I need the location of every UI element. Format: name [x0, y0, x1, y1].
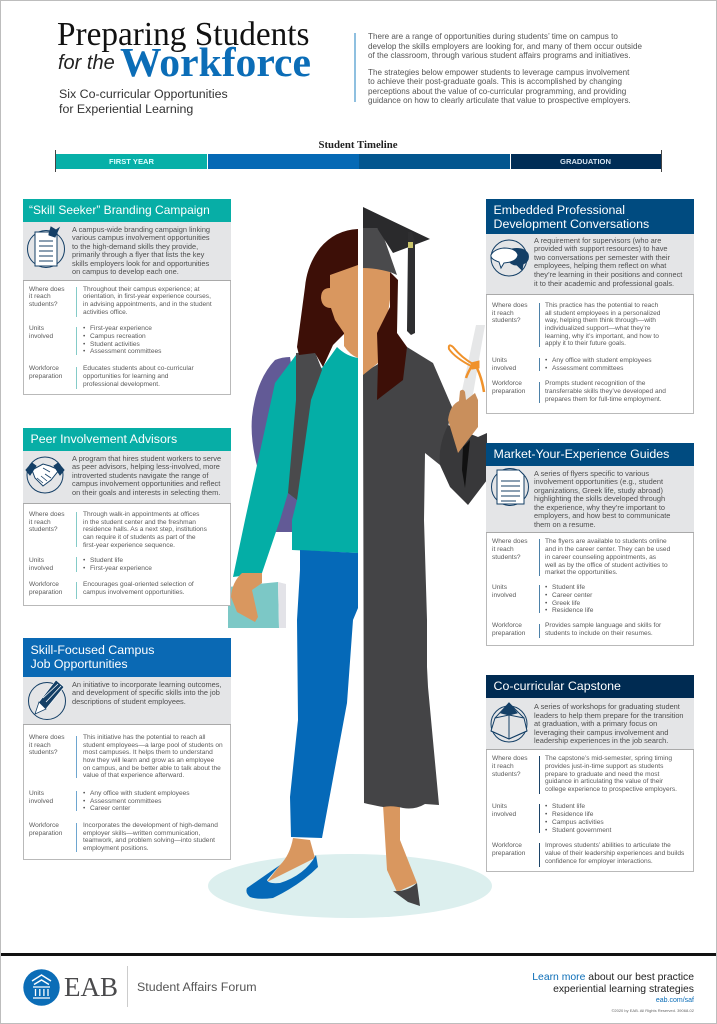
summary text: involvement opportunities (e.g., student	[534, 477, 663, 486]
summary band	[486, 466, 694, 533]
workforce label	[29, 365, 62, 380]
where label: it reach	[492, 546, 514, 553]
units list: Student life	[552, 803, 585, 810]
where label: students?	[492, 554, 521, 561]
icon: document	[491, 468, 529, 506]
where text: The flyers are available to students online	[545, 538, 667, 545]
where label	[492, 538, 528, 561]
student half	[228, 229, 358, 899]
summary text: A requirement for supervisors (who are	[534, 236, 661, 245]
workforce label: preparation	[492, 388, 525, 395]
where text: student employees—a large pool of students on	[83, 742, 223, 749]
where text	[545, 302, 660, 347]
icon: pencil	[28, 680, 66, 720]
heading: Development Conversations	[494, 217, 649, 231]
summary band	[23, 677, 231, 724]
summary text	[534, 236, 682, 288]
workforce label: Workforce	[492, 842, 522, 849]
title	[57, 16, 311, 85]
workforce label	[29, 822, 62, 837]
units list: Residence life	[552, 607, 593, 614]
ribbon	[449, 345, 484, 392]
panel: Embedded Professional Development Conversations	[486, 199, 694, 414]
summary text: employers, and how best to communicate	[534, 511, 670, 520]
workforce label: preparation	[29, 373, 62, 380]
units list: Greek life	[552, 600, 580, 607]
heading: “Skill Seeker” Branding Campaign	[29, 203, 210, 217]
copyright: ©2020 by EAB. All Rights Reserved. 39068-02	[611, 1008, 694, 1013]
where text: well as by the office of student activities to	[545, 562, 668, 569]
units label	[492, 584, 516, 600]
where label	[492, 755, 528, 778]
call to action	[532, 972, 694, 996]
where text	[83, 734, 223, 779]
where text: This initiative has the potential to reach all	[83, 734, 205, 741]
summary text: as peer advisors, helping less-involved, more	[72, 462, 220, 471]
workforce text: Prompts student recognition of the	[545, 380, 645, 387]
where text: college experience to prospective employers.	[545, 786, 677, 793]
where text: value of that experience afterward.	[83, 772, 184, 779]
workforce text: Educates students about co-curricular	[83, 365, 194, 372]
intro text: develop the skills employers are looking for, and many of them occur outside	[368, 42, 642, 50]
units list	[545, 584, 593, 615]
units label: Units	[492, 584, 507, 591]
workforce label: Workforce	[492, 622, 522, 629]
summary text: primarily through a flyer that lists the key	[72, 250, 204, 259]
units list: Residence life	[552, 811, 593, 818]
panel: Co-curricular Capstone	[486, 675, 694, 872]
summary text: to the high-demand skills they provide,	[72, 242, 198, 251]
summary text: A series of flyers specific to various	[534, 469, 649, 478]
icon: EAB logo	[23, 969, 60, 1006]
summary text: skills employers look for and opportunities	[72, 259, 209, 268]
units label: involved	[492, 592, 516, 599]
summary text	[534, 469, 670, 529]
right leg	[383, 805, 417, 892]
summary text	[72, 680, 222, 706]
where text: can require it of students as part of the	[83, 534, 196, 541]
summary text: leaders to help them prepare for the transition	[534, 711, 684, 720]
summary text: descriptions of student employees.	[72, 697, 186, 706]
panel: Skill-Focused Campus Job Opportunities	[23, 638, 231, 860]
workforce label	[492, 842, 525, 858]
icon: clipboard with pin	[27, 226, 65, 268]
where label: students?	[492, 317, 521, 324]
workforce text	[545, 622, 661, 638]
where label: Where does	[492, 538, 528, 545]
summary text: campus involvement opportunities and reflect	[72, 479, 220, 488]
summary text: leadership experiences in the job search.	[534, 736, 668, 745]
summary text: them on a resume.	[534, 520, 596, 529]
where text: This practice has the potential to reach	[545, 302, 658, 309]
summary text: provided with support resources) to have	[534, 244, 668, 253]
units label	[492, 803, 516, 819]
summary text	[534, 703, 684, 746]
workforce text: confidence for employer interactions.	[545, 858, 653, 865]
student timeline bar	[55, 150, 662, 172]
where text: in advising appointments, and in the student	[83, 301, 212, 308]
hand holding diploma	[448, 390, 478, 453]
where label: it reach	[29, 742, 51, 749]
units label: Units	[29, 325, 44, 332]
units list: Career center	[90, 805, 130, 812]
summary text: An initiative to incorporate learning outcomes,	[72, 680, 222, 689]
workforce text: students to include on their resumes.	[545, 630, 653, 637]
workforce label: Workforce	[29, 822, 59, 829]
hand holding book	[231, 573, 262, 622]
workforce text: teamwork, and problem solving—into student	[83, 837, 215, 844]
teal top	[233, 347, 358, 577]
units list: Assessment committees	[90, 348, 161, 355]
sleeve cuff	[440, 425, 487, 505]
where label: it reach	[29, 519, 51, 526]
for the: for the	[58, 52, 115, 74]
workforce text: professional development.	[83, 381, 160, 388]
summary band	[486, 698, 694, 750]
units list: Student life	[90, 557, 123, 564]
units list: Campus activities	[552, 819, 604, 826]
summary text: organizations, Greek life, study abroad)	[534, 486, 663, 495]
units list: First-year experience	[90, 325, 152, 332]
workforce text: Encourages goal-oriented selection of	[83, 581, 194, 588]
icon: handshake	[25, 456, 65, 494]
where text: apply it to their future goals.	[545, 340, 626, 347]
heading	[23, 199, 231, 222]
workforce text: Incorporates the development of high-demand	[83, 822, 218, 829]
units label: Units	[29, 790, 44, 797]
call to action: experiential learning strategies	[553, 984, 694, 995]
panel: Market-Your-Experience Guides	[486, 443, 694, 646]
first year segment: FIRST YEAR	[109, 157, 154, 166]
units label: involved	[492, 365, 516, 372]
hair	[297, 229, 358, 367]
face and neck	[321, 265, 358, 358]
intro text: perceptions about the value of co-curricular programming, and providing	[368, 86, 626, 96]
where text: individualized support—what they’re	[545, 325, 651, 332]
units list: Assessment committees	[90, 798, 161, 805]
workforce label	[492, 380, 525, 395]
where text	[545, 538, 670, 576]
where text: in the student center and the freshman	[83, 519, 196, 526]
where text: prepare to graduate and need the most	[545, 771, 659, 778]
summary text: highlighting the skills developed through	[534, 494, 665, 503]
summary band	[23, 222, 231, 281]
icon: capstone pyramid	[486, 675, 694, 750]
long hair	[377, 272, 407, 400]
footer rule	[1, 953, 716, 956]
where text: way, helping them think through—with	[545, 317, 656, 324]
summary text: employees, helping them reflect on what	[534, 261, 666, 270]
units label	[29, 557, 53, 572]
first year segment	[56, 154, 207, 169]
panel: Skill Seeker Branding Campaign	[23, 199, 231, 395]
where label: students?	[492, 771, 521, 778]
where label: Where does	[492, 302, 528, 309]
where label: it reach	[492, 310, 514, 317]
workforce text: campus involvement opportunities.	[83, 589, 185, 596]
workforce text	[83, 581, 194, 596]
units label: Units	[29, 557, 44, 564]
workforce text: opportunities for learning and	[83, 373, 168, 380]
units list: Any office with student employees	[552, 357, 652, 364]
heading	[486, 199, 694, 234]
web link: eab.com/saf	[656, 997, 694, 1004]
units list: Any office with student employees	[90, 790, 190, 797]
summary text: on campus to develop each one.	[72, 267, 179, 276]
units label: involved	[29, 333, 53, 340]
units list	[83, 557, 152, 572]
summary text: introverted students navigate the range of	[72, 471, 208, 480]
icon: speech bubbles	[490, 240, 529, 276]
where text: in career counseling appointments, as	[545, 554, 656, 561]
summary text: A program that hires student workers to serve	[72, 454, 221, 463]
where text: market the opportunities.	[545, 569, 618, 576]
units label: involved	[492, 811, 516, 818]
workforce label: Workforce	[29, 365, 59, 372]
units list	[83, 325, 162, 355]
summary text: on their goals and interests in selecting them.	[72, 488, 220, 497]
where text: first-year experience sequence.	[83, 542, 175, 549]
workforce text	[83, 365, 194, 388]
workforce label: preparation	[29, 830, 62, 837]
book	[228, 582, 279, 628]
where text: Throughout their campus experience; at	[83, 286, 200, 292]
left foot	[267, 838, 315, 882]
intro text	[368, 32, 642, 105]
workforce text	[83, 822, 218, 852]
title line one: Preparing Students	[57, 16, 309, 53]
where text: guidance in articulating the value of their	[545, 778, 663, 785]
where label	[29, 511, 65, 533]
where text: activities office.	[83, 309, 128, 316]
workforce label: Workforce	[492, 380, 522, 387]
where label: it reach	[29, 293, 51, 300]
summary text: they’re learning in their positions and connect	[534, 270, 682, 279]
summary text: the experience, why they’re important to	[534, 503, 665, 512]
summary text	[72, 225, 210, 276]
intro text: There are a range of opportunities during students’ time on campus to	[368, 32, 618, 41]
units list: Campus recreation	[90, 333, 146, 340]
summary text: leveraging their campus involvement and	[534, 728, 668, 737]
flat shoe	[246, 855, 318, 899]
workforce text: Improves students’ abilities to articulate the	[545, 842, 671, 849]
diploma	[460, 325, 485, 400]
workforce label: preparation	[29, 589, 62, 596]
workforce text: employer skills—written communication,	[83, 830, 200, 837]
heading	[23, 428, 231, 451]
workforce label	[492, 622, 525, 638]
where text: learning, why it’s important, and how to	[545, 333, 659, 340]
where label: students?	[29, 749, 58, 756]
units list	[545, 357, 652, 372]
workforce text: prepares them for full-time employment.	[545, 396, 662, 403]
where label: students?	[29, 526, 58, 533]
workforce text: value of their leadership experiences and builds	[545, 850, 684, 857]
backpack strap	[288, 352, 322, 500]
where text: on campus, and be better able to talk about the	[83, 765, 221, 772]
units list: First-year experience	[90, 565, 152, 572]
where label	[29, 734, 65, 756]
summary text: A series of workshops for graduating student	[534, 702, 680, 711]
where text	[545, 755, 677, 794]
graduation segment: GRADUATION	[560, 157, 611, 166]
summary text: A campus-wide branding campaign linking	[72, 225, 210, 234]
subtitle: Six Co-curricular Opportunities	[59, 87, 228, 101]
ground ellipse	[208, 854, 492, 918]
where label: students?	[29, 301, 58, 308]
where label: it reach	[492, 763, 514, 770]
where label: Where does	[29, 734, 65, 741]
units list: Assessment committees	[552, 365, 623, 372]
where text: all student employees in a personalized	[545, 310, 660, 317]
heading: Skill-Focused Campus	[30, 643, 154, 657]
units label	[29, 790, 53, 805]
where label: Where does	[29, 511, 65, 518]
units list: Student government	[552, 827, 611, 834]
heading: Market-Your-Experience Guides	[494, 447, 669, 461]
summary text: various campus involvement opportunities	[72, 233, 210, 242]
call to action: Learn more about our best practice	[532, 972, 694, 982]
where label	[29, 286, 65, 308]
units label	[492, 357, 516, 372]
units label: involved	[29, 798, 53, 805]
intro text: of the classroom, through various student affairs programs and initiatives. The strategies below empower students to leverage campus involvement	[368, 51, 631, 76]
summary text: and development of specific skills into the job	[72, 688, 220, 697]
summary text: it to their academic and professional goals.	[534, 279, 674, 288]
subtitle	[59, 87, 228, 116]
panel: Peer Involvement Advisors	[23, 428, 231, 606]
where text: and in the career center. They can be used	[545, 546, 670, 553]
graduation segment	[510, 154, 660, 169]
mortarboard	[363, 207, 430, 253]
where text: Through walk-in appointments at offices	[83, 511, 199, 518]
units label: Units	[492, 357, 507, 364]
workforce label: preparation	[492, 850, 525, 857]
where text	[83, 286, 212, 316]
workforce text	[545, 380, 666, 403]
units list	[83, 790, 190, 812]
workforce label	[29, 581, 62, 596]
units list: Career center	[552, 592, 592, 599]
intro text: guidance on how to clearly articulate that value to prospective employers.	[368, 96, 631, 105]
summary band	[23, 451, 231, 504]
workforce label: preparation	[492, 630, 525, 637]
heading: Co-curricular Capstone	[494, 679, 621, 693]
where text	[83, 511, 207, 549]
where text: orientation, in first-year experience courses,	[83, 293, 211, 300]
where label: Where does	[492, 755, 528, 762]
where label	[492, 302, 528, 324]
summary text: at graduation, with a primary focus on	[534, 719, 657, 728]
heading: Job Opportunities	[30, 657, 128, 671]
heading	[23, 638, 231, 677]
graduate half	[363, 207, 487, 906]
workforce text: Provides sample language and skills for	[545, 622, 661, 629]
where text: residence halls. As a next step, institutions	[83, 526, 207, 533]
EAB wordmark: EAB	[64, 972, 118, 1002]
tassel	[407, 232, 415, 335]
workforce text	[545, 842, 684, 866]
timeline heading: Student Timeline	[318, 139, 398, 151]
workforce text: employment positions.	[83, 845, 149, 852]
footer divider	[127, 966, 128, 1007]
cap skull	[363, 228, 397, 275]
where label: Where does	[29, 286, 65, 292]
units label: Units	[492, 803, 507, 810]
Workforce: Workforce	[120, 39, 311, 85]
heel	[393, 883, 420, 906]
workforce label: Workforce	[29, 581, 59, 588]
where text: most campuses. It helps them to understand	[83, 749, 213, 756]
summary text	[72, 454, 221, 497]
units label	[29, 325, 53, 340]
units label: involved	[29, 565, 53, 572]
summary band	[486, 234, 694, 294]
jeans	[290, 550, 358, 838]
workforce text: transferrable skills they’ve developed and	[545, 388, 666, 395]
intro text: to achieve their post-graduate goals. This is accomplished by changing	[368, 77, 622, 86]
summary text: two conversations per semester with their	[534, 253, 670, 262]
heading	[486, 675, 694, 698]
heading	[486, 443, 694, 466]
face and neck	[363, 268, 391, 375]
subtitle: for Experiential Learning	[59, 102, 193, 116]
units list: Student life	[552, 584, 585, 591]
where text: provides just-in-time support as students	[545, 763, 663, 770]
backpack	[252, 357, 300, 532]
where text: how they will learn and grow as an employee	[83, 757, 214, 764]
forum name: Student Affairs Forum	[137, 980, 257, 994]
units list	[545, 803, 611, 834]
heading: Peer Involvement Advisors	[30, 432, 177, 446]
where text: The capstone’s mid-semester, spring timing	[545, 755, 672, 762]
units list: Student activities	[90, 341, 140, 348]
intro rule	[354, 33, 356, 102]
heading: Embedded Professional	[494, 202, 625, 216]
gown	[363, 347, 452, 808]
